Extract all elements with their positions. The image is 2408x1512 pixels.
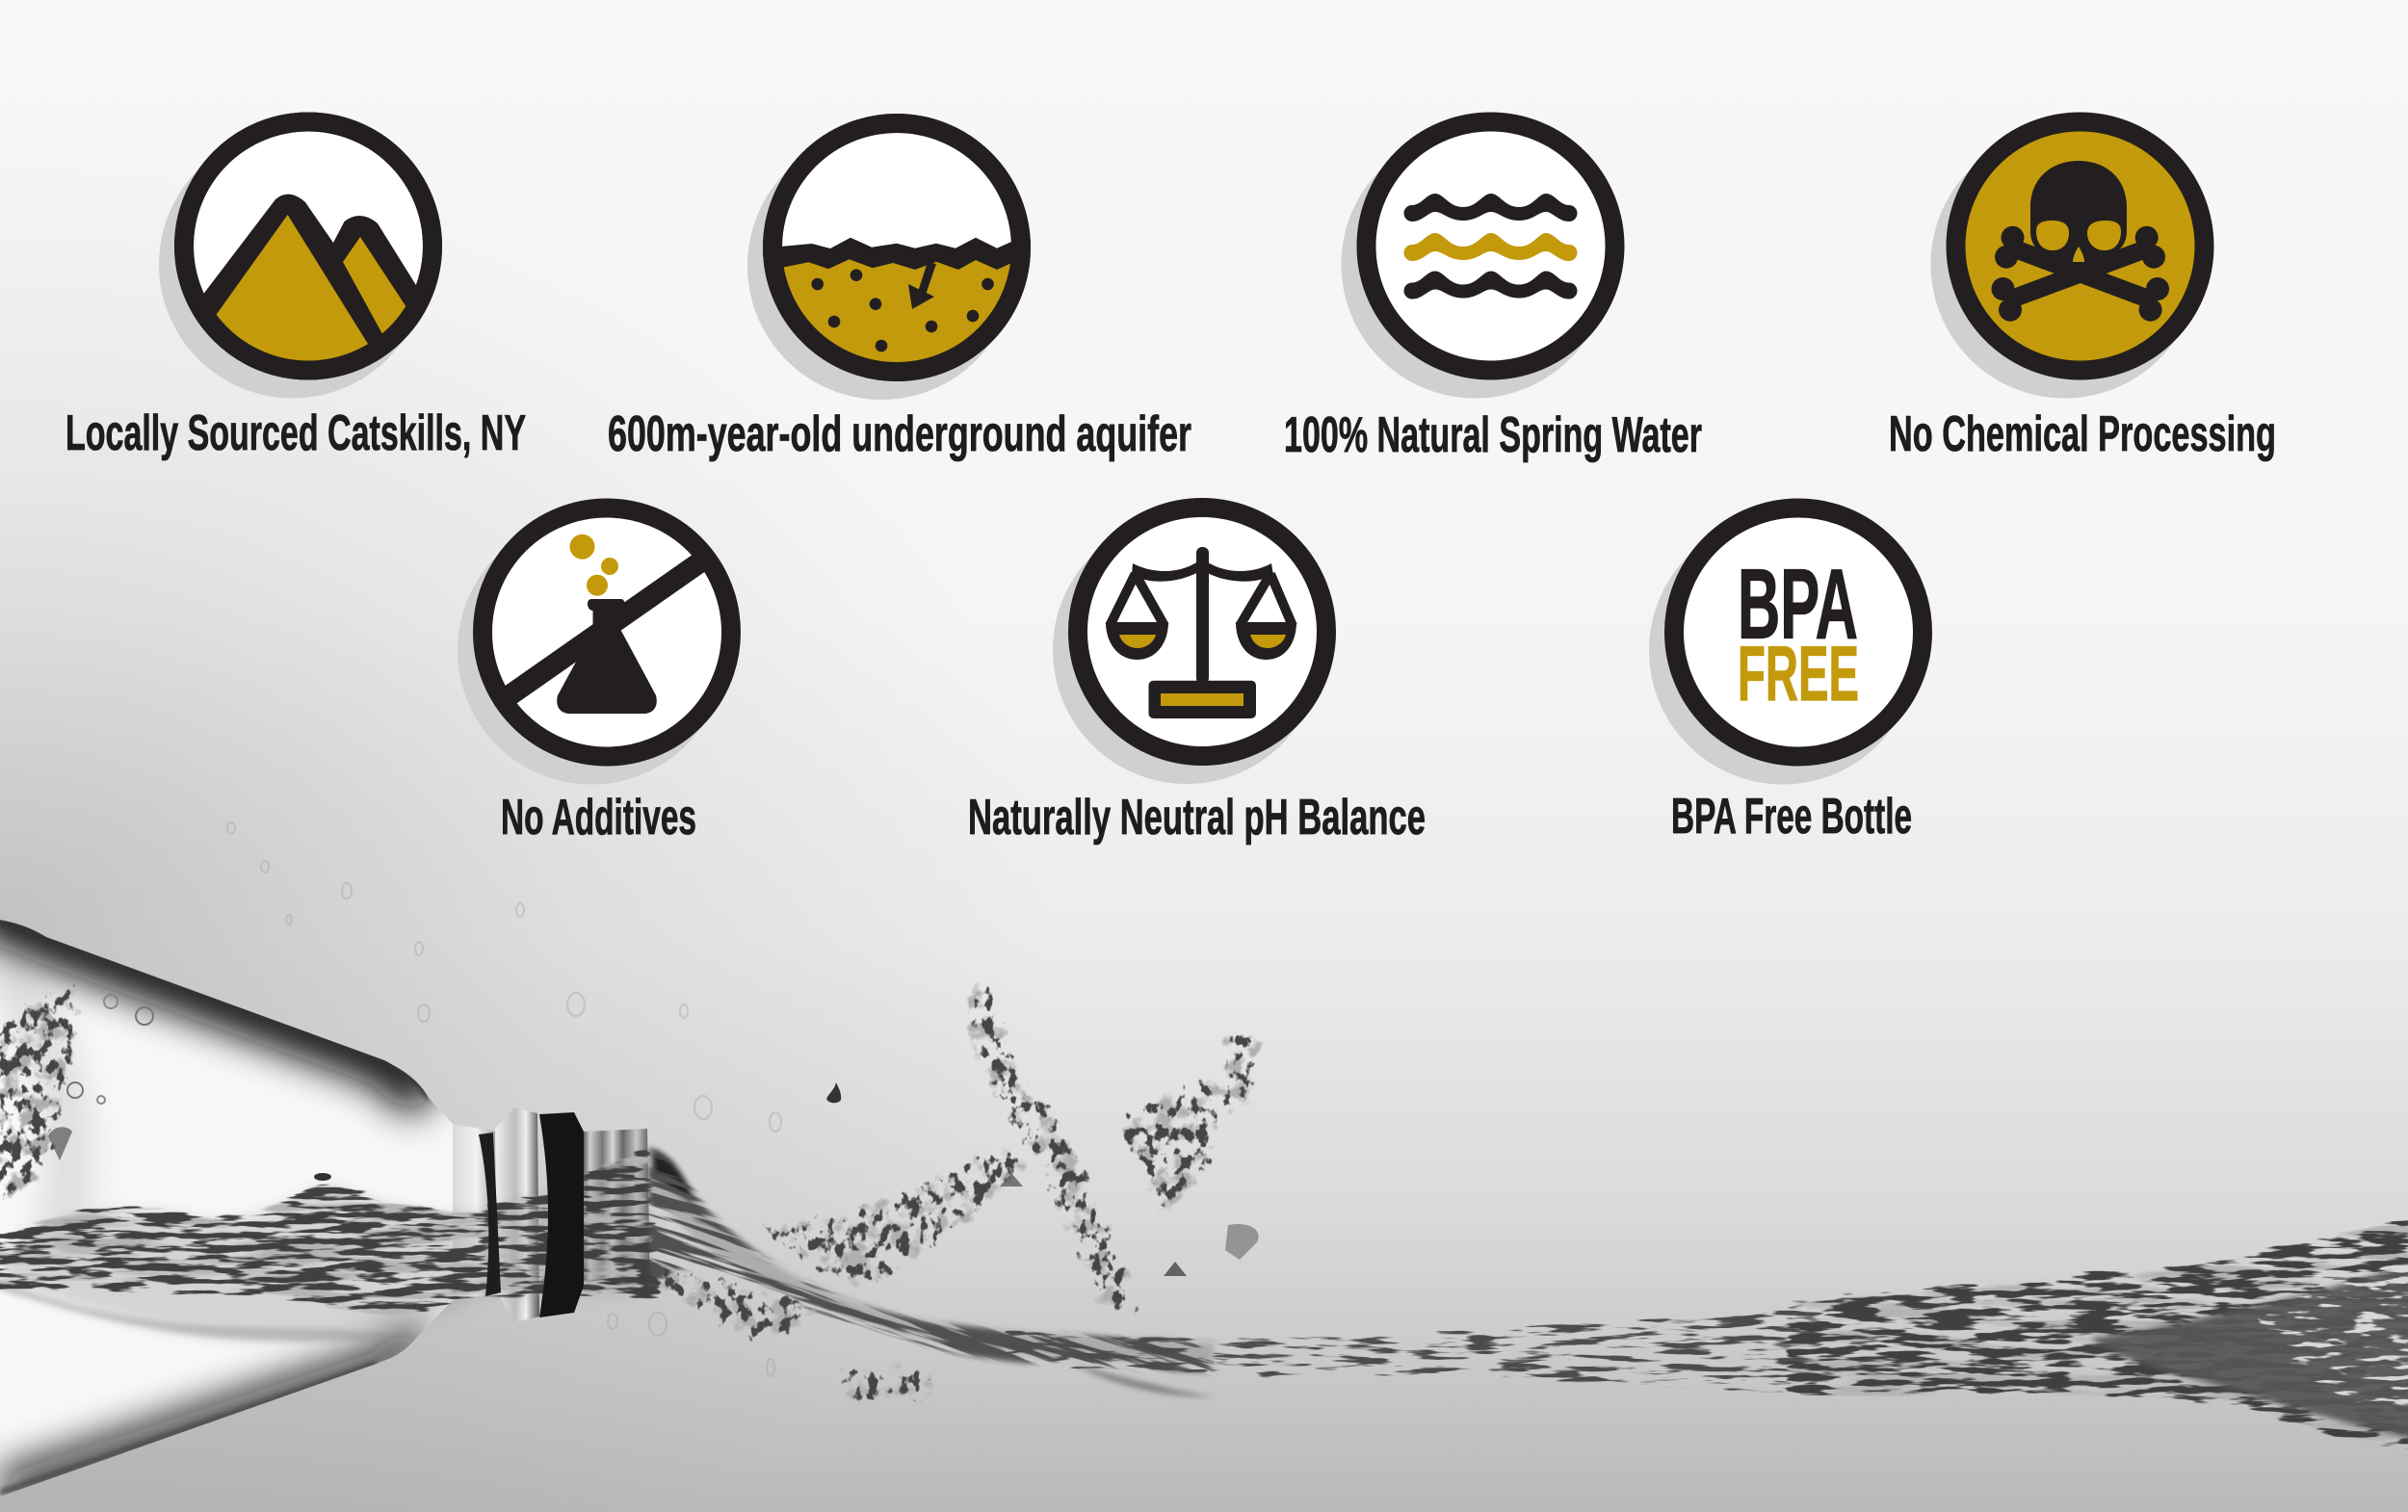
icon: aquifer	[747, 123, 1023, 400]
bubbles	[570, 534, 618, 596]
splash right	[1093, 1059, 1228, 1221]
base gold bar	[1161, 693, 1243, 706]
stray drops	[48, 995, 1259, 1276]
ring	[1078, 508, 1326, 756]
black cap ring	[539, 1112, 584, 1317]
label: 100% Natural Spring Water: 100% Natural Spring Water	[1284, 407, 1702, 463]
droplets on background	[227, 822, 781, 1376]
wave bottom	[1404, 272, 1578, 299]
ring	[1674, 508, 1923, 757]
bottle body	[0, 905, 501, 1507]
icon: balance scales	[1053, 508, 1326, 784]
ring	[1955, 121, 2204, 370]
eye sockets and nose	[2036, 221, 2121, 262]
ring	[483, 508, 731, 757]
ring	[1366, 121, 1614, 370]
arrow	[908, 262, 936, 309]
text BPA: BPA	[1738, 549, 1858, 660]
label: BPA Free Bottle: BPA Free Bottle	[1671, 789, 1912, 845]
shadow	[159, 131, 427, 399]
splash left in bottle	[0, 963, 89, 1218]
label: 600m-year-old underground aquifer: 600m-year-old underground aquifer	[608, 406, 1191, 462]
shadow	[458, 516, 725, 784]
pole and base	[1132, 547, 1273, 718]
shadow	[1053, 516, 1321, 784]
splash column	[960, 969, 1156, 1329]
stream tail streaks	[1002, 1319, 1214, 1382]
lower grey swirl band	[0, 1281, 405, 1342]
icon: no additives	[458, 508, 731, 784]
neck dark band	[479, 1133, 501, 1296]
flask	[557, 599, 657, 714]
ring	[772, 123, 1021, 372]
mountains	[204, 195, 416, 360]
shadow	[1930, 131, 2198, 399]
streaks inside bottle	[0, 1141, 665, 1319]
splash arc	[737, 1138, 1050, 1300]
shadow	[747, 132, 1015, 400]
dark water mass at right	[2090, 1262, 2408, 1440]
stream fill	[649, 1148, 1214, 1363]
wave middle	[1404, 233, 1578, 261]
specks lower	[833, 1358, 944, 1411]
crossbones	[1992, 226, 2169, 322]
dense band right part	[1782, 1211, 2408, 1459]
light streaks over dark mass	[2244, 1242, 2408, 1435]
right pan	[1236, 574, 1296, 660]
soft body of water inside bottle	[0, 1151, 649, 1341]
left pan	[1106, 574, 1168, 660]
slash	[505, 555, 705, 703]
stream streaks	[645, 1145, 1217, 1376]
threads	[582, 1129, 650, 1293]
water	[0, 981, 2408, 1449]
icon: mountains	[159, 121, 445, 399]
bottle neck	[453, 1124, 501, 1300]
ring	[184, 121, 432, 370]
icon: skull and crossbones	[1930, 121, 2204, 399]
splash top right	[1216, 1026, 1267, 1127]
text FREE: FREE	[1738, 631, 1859, 717]
tail streak	[1075, 1366, 1216, 1396]
skull	[2030, 161, 2127, 276]
label: No Additives: No Additives	[501, 790, 696, 846]
splash under spout	[655, 1257, 833, 1349]
wave top	[1404, 194, 1578, 222]
soil	[782, 237, 1011, 362]
icon: waves	[1341, 121, 1614, 399]
bottle	[0, 905, 650, 1507]
sparse band left part	[1204, 1295, 1830, 1398]
shadow	[1341, 131, 1609, 399]
spout dark slab	[653, 1151, 695, 1204]
label: Locally Sourced Catskills, NY: Locally Sourced Catskills, NY	[65, 405, 526, 461]
label: Naturally Neutral pH Balance: Naturally Neutral pH Balance	[968, 790, 1426, 846]
soil dots	[811, 269, 994, 352]
neck collar	[495, 1108, 539, 1322]
shadow	[1649, 516, 1917, 784]
icon: BPA free	[1649, 508, 1923, 784]
